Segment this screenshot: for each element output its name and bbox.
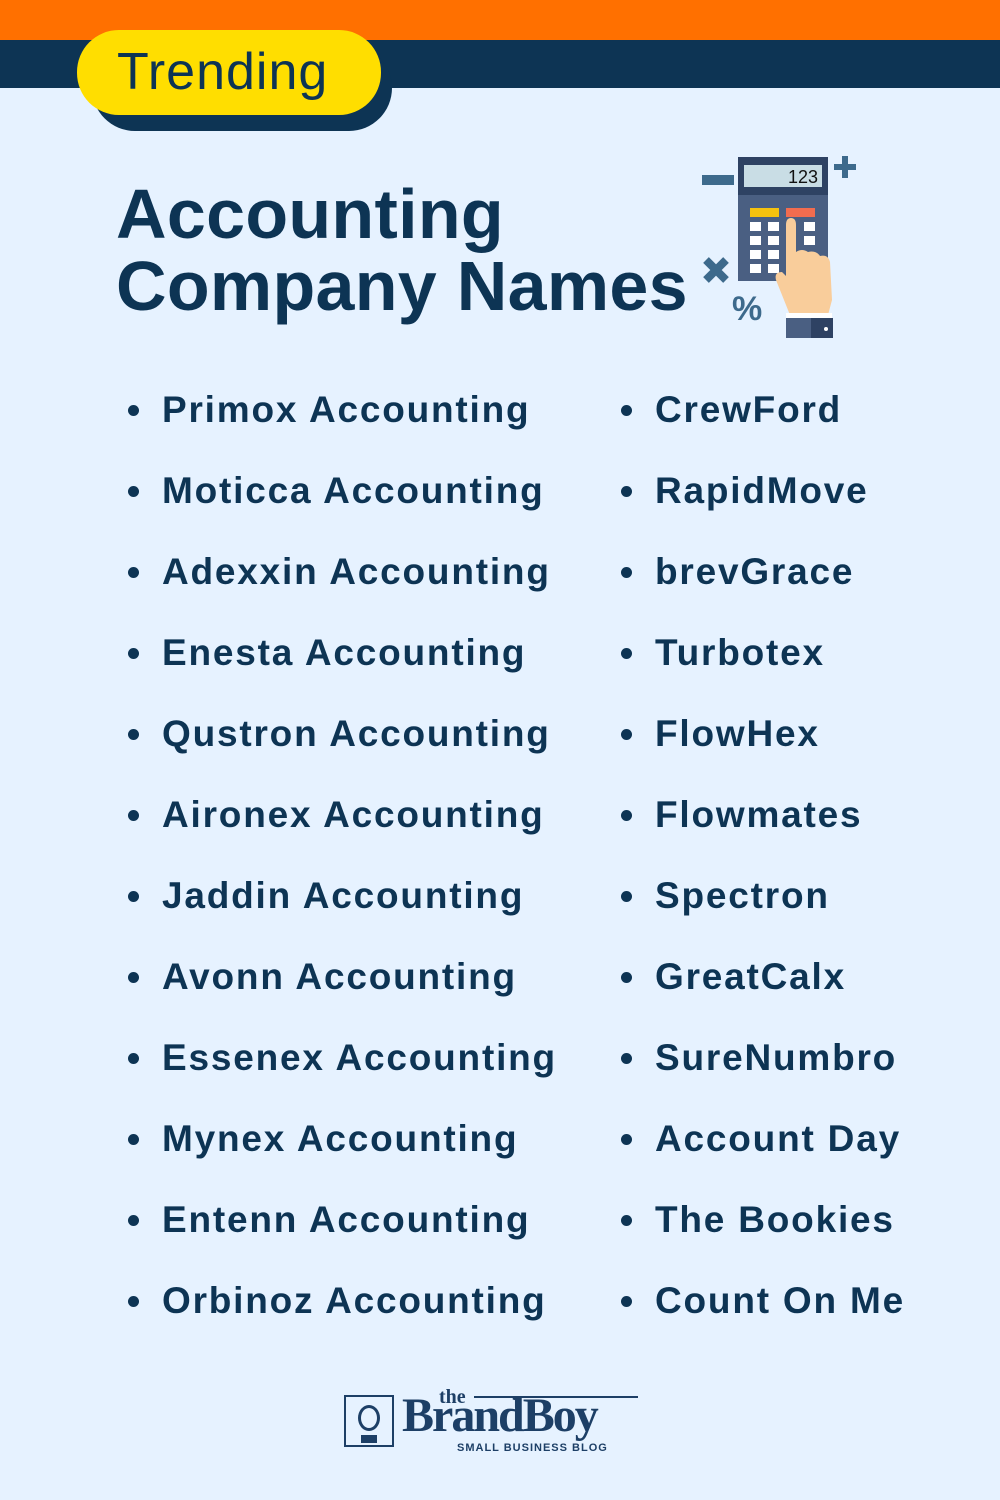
list: left column: Entenn Accounting	[162, 1199, 530, 1240]
logo: the BrandBoy: SMALL BUSINESS BLOG	[457, 1442, 608, 1454]
list: left column: Jaddin Accounting	[162, 875, 524, 916]
list: left column: Primox Accounting	[162, 389, 530, 430]
list: right column: Flowmates	[655, 794, 862, 835]
list: right column: FlowHex	[655, 713, 820, 754]
list: left column: Avonn Accounting	[162, 956, 517, 997]
top orange bar	[0, 0, 1000, 40]
list: right column	[621, 389, 905, 1321]
list: left column	[128, 389, 557, 1321]
list: left column: Essenex Accounting	[162, 1037, 557, 1078]
list: right column: GreatCalx	[655, 956, 846, 997]
list: left column: Qustron Accounting	[162, 713, 551, 754]
list: left column: Orbinoz Accounting	[162, 1280, 547, 1321]
title: Accounting	[116, 175, 504, 253]
list: left column: Moticca Accounting	[162, 470, 545, 511]
icon: calculator with hand: %	[732, 290, 762, 328]
list: right column: The Bookies	[655, 1199, 895, 1240]
list: left column: Aironex Accounting	[162, 794, 545, 835]
title: Company Names	[116, 247, 688, 325]
title	[116, 175, 688, 325]
list: right column: CrewFord	[655, 389, 842, 430]
list: left column: Adexxin Accounting	[162, 551, 551, 592]
badge text: Trending	[117, 43, 328, 101]
trending badge	[77, 30, 392, 131]
list: right column: Spectron	[655, 875, 830, 916]
navy band	[0, 40, 1000, 88]
list: left column: Mynex Accounting	[162, 1118, 518, 1159]
logo icon	[344, 1395, 394, 1447]
list: right column: brevGrace	[655, 551, 854, 592]
logo: the BrandBoy	[344, 1386, 638, 1454]
logo: the BrandBoy: BrandBoy	[402, 1389, 597, 1442]
list: right column: Turbotex	[655, 632, 825, 673]
icon: calculator with hand	[702, 156, 856, 338]
list: left column: Enesta Accounting	[162, 632, 526, 673]
list: right column: RapidMove	[655, 470, 869, 511]
list: right column: Count On Me	[655, 1280, 905, 1321]
list: right column: Account Day	[655, 1118, 901, 1159]
icon: calculator with hand: 123	[788, 167, 818, 187]
logo text: the	[439, 1386, 466, 1408]
list: right column: SureNumbro	[655, 1037, 897, 1078]
